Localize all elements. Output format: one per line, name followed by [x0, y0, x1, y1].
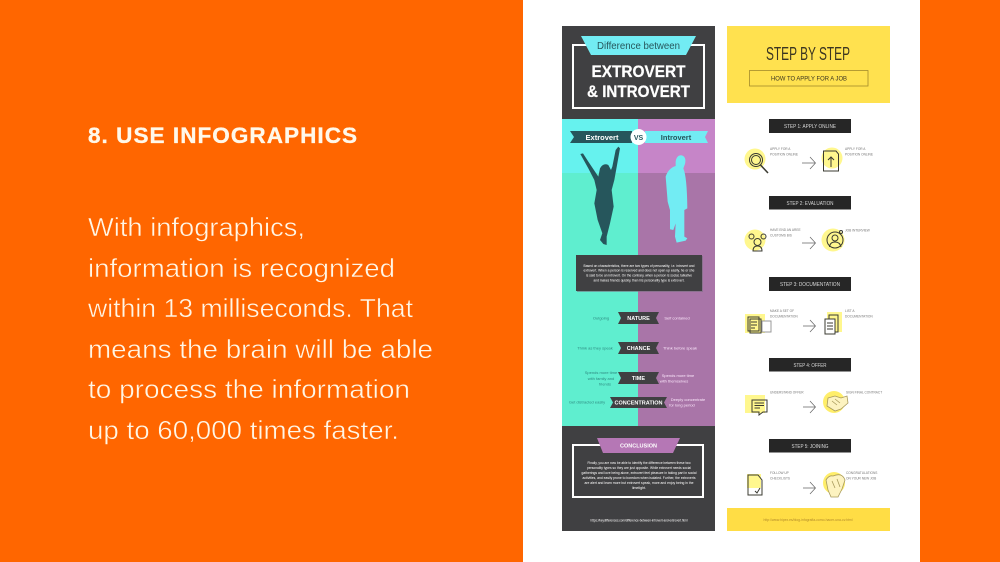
comparison: concentration: Deeply concentrate	[671, 397, 706, 402]
description box	[576, 255, 703, 292]
description box: and makes friends quickly, then his personality type is extrovert.	[594, 278, 684, 282]
arrow	[803, 482, 816, 494]
step 3: LIST A	[845, 309, 855, 313]
introvert column	[638, 119, 715, 426]
title frame	[573, 36, 704, 108]
body text: With infographics,	[88, 212, 305, 242]
step 4: UNDERSTAND OFFER	[770, 390, 804, 394]
title frame: & INTROVERT	[587, 83, 690, 101]
comparison: nature: NATURE	[627, 316, 650, 322]
icon: speech document	[745, 395, 767, 415]
icon: person search	[822, 228, 844, 252]
comparison: chance	[577, 342, 697, 354]
header banner	[727, 26, 890, 103]
description box: is said to be an introvert. On the contrary, when a person is social, talkative	[586, 274, 692, 278]
conclusion frame: activities, and easily prone to boredom when isolated. Further, the extroverts	[582, 476, 696, 480]
comparison: concentration: CONCENTRATION	[614, 400, 663, 406]
step 2	[744, 196, 870, 252]
step 5: STEP 5: JOINING	[792, 444, 828, 450]
body text: information is recognized	[88, 253, 395, 283]
vs badge: VS	[634, 135, 643, 142]
step 3: DOCUMENTATION	[845, 314, 873, 318]
comparison: chance: Think as they speak	[577, 346, 613, 350]
step 4	[745, 358, 882, 415]
arrow	[803, 401, 816, 413]
conclusion frame: gatherings and love being alone, extrovert feel pleasure in taking part in social	[582, 471, 697, 475]
extrovert ribbon	[570, 131, 632, 143]
step 1	[744, 119, 873, 173]
step 1: APPLY FOR A	[770, 147, 791, 151]
conclusion frame: personality types so they are just opposite. While extrovert needs social	[587, 466, 691, 470]
step 2: JOB INTERVIEW	[845, 228, 870, 232]
body text: up to 60,000 times faster.	[88, 415, 399, 445]
arrow	[802, 237, 816, 249]
step 1: APPLY FOR A	[845, 147, 866, 151]
comparison: chance: CHANCE	[627, 346, 651, 352]
comparison: time: friends	[599, 382, 611, 386]
description box: extrovert. When a person is reserved and does not open up easily, he or she	[584, 268, 694, 272]
icon: clapping hands	[823, 472, 845, 497]
step 3: MAKE A SET OF	[770, 309, 794, 313]
comparison: time	[585, 370, 695, 386]
title frame: Difference between	[597, 41, 680, 52]
comparison: time: Spends more time	[585, 370, 618, 375]
step 5	[747, 439, 877, 497]
header banner: STEP BY STEP	[766, 44, 850, 64]
conclusion frame: are alert and learn more but extrovert speak, more and enjoy being in the	[584, 481, 694, 485]
comparison: time: Spends more time	[662, 373, 695, 378]
panel: step by step infographic	[727, 26, 890, 531]
comparison: time: with themselves	[660, 378, 688, 384]
comparison: concentration: Get distracted easily	[569, 400, 605, 404]
step 3: DOCUMENTATION	[770, 314, 798, 318]
conclusion frame: Finally, you are now be able to identify the difference between these two	[588, 461, 690, 465]
step 2: STEP 2: EVALUATION	[786, 201, 834, 207]
icon: magnifier with heart	[744, 148, 768, 173]
comparison: nature: Self contained	[664, 316, 690, 320]
panel: white sheet	[523, 0, 920, 562]
footer banner	[727, 508, 890, 531]
comparison: time: TIME	[632, 376, 645, 382]
heading: 8. USE INFOGRAPHICS	[88, 123, 357, 148]
comparison: concentration: for long period	[669, 402, 695, 408]
introvert ribbon	[645, 131, 708, 143]
vs badge	[630, 129, 646, 145]
introvert silhouette	[666, 155, 687, 243]
step 1: POSITION ONLINE	[770, 152, 798, 156]
body text: to process the information	[88, 374, 410, 404]
comparison: chance: Think before speak	[663, 346, 697, 350]
conclusion frame: limelight.	[632, 486, 646, 490]
step 1: STEP 1: APPLY ONLINE	[784, 124, 836, 130]
icon: upload document	[822, 148, 842, 171]
arrow	[803, 320, 816, 332]
step 2: HAVE END AN AREE	[770, 228, 801, 232]
description box: Based on characteristics, there are two types of personality, i.e. introvert and	[584, 264, 694, 268]
footer banner: http://www.hipex.es/blog-infografia-como-hacer-una-cv.html	[764, 518, 853, 522]
extrovert column	[562, 119, 638, 426]
body text: within 13 milliseconds. That	[87, 293, 414, 323]
introvert ribbon: Introvert	[661, 133, 692, 142]
comparison: time: with family and	[588, 376, 614, 381]
arrow	[802, 157, 816, 169]
step 4: SIGN FINAL CONTRACT	[846, 390, 882, 394]
icon: people	[744, 230, 766, 251]
extrovert silhouette	[580, 147, 620, 245]
step 5: CHECKLISTS	[770, 476, 790, 480]
icon: document stack	[825, 312, 842, 334]
icon: checked document	[747, 474, 762, 495]
comparison: nature	[593, 312, 690, 324]
icon: handshake	[823, 391, 848, 413]
extrovert ribbon: Extrovert	[586, 133, 619, 142]
title frame: EXTROVERT	[592, 63, 686, 81]
panel: extrovert and introvert infographic	[562, 26, 715, 531]
step 4: STEP 4: OFFER	[794, 363, 827, 369]
source url: https://keydifferences.com/difference-between-introvert-and-extrovert.html	[590, 518, 688, 522]
step 1: POSITION ONLINE	[845, 152, 873, 156]
body text: means the brain will be able	[88, 334, 433, 364]
step 5: FOLLOW UP	[770, 471, 789, 475]
body text	[87, 212, 433, 445]
step 5: ON YOUR NEW JOB	[846, 476, 876, 480]
comparison: concentration	[569, 397, 706, 408]
comparison: nature: Outgoing	[593, 316, 609, 320]
step 2: CUSTOMS BIS	[770, 234, 792, 238]
header banner: HOW TO APPLY FOR A JOB	[771, 76, 847, 82]
step 5: CONGRATULATIONS	[846, 471, 877, 475]
conclusion frame	[573, 438, 703, 497]
icon: documents exchange	[745, 314, 771, 333]
conclusion frame: CONCLUSION	[620, 444, 657, 450]
step 3	[745, 277, 873, 334]
step 3: STEP 3: DOCUMENTATION	[780, 282, 840, 288]
